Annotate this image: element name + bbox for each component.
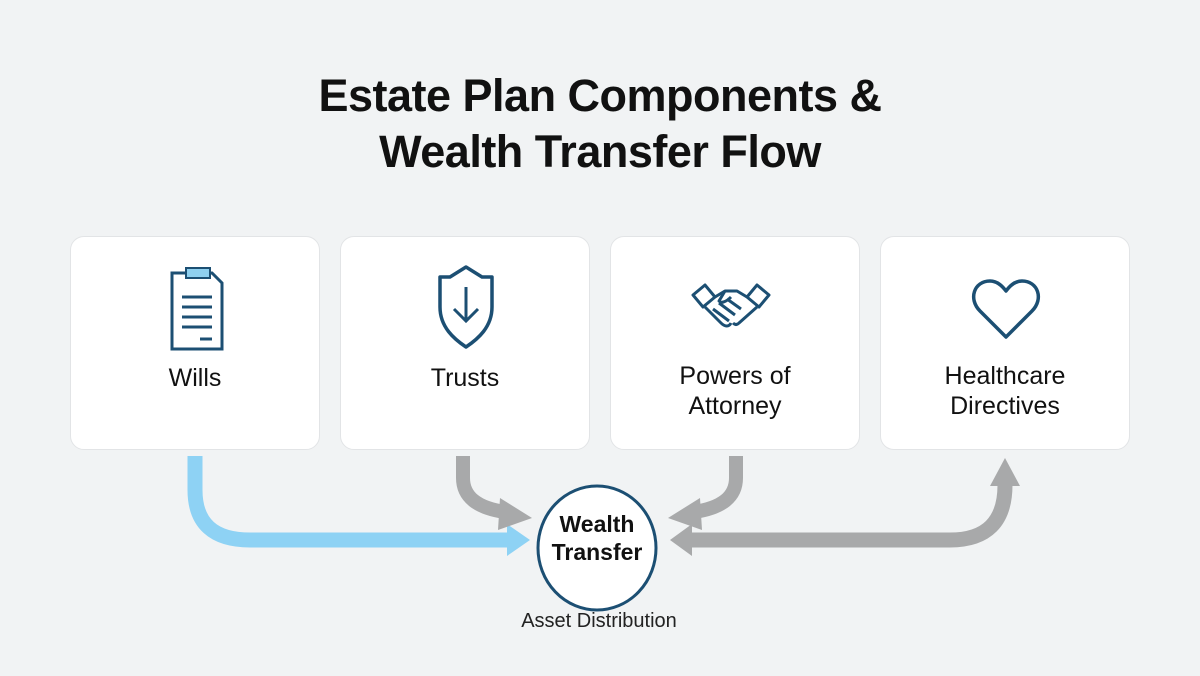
node: wealth transfer: Transfer [552, 539, 642, 565]
icon: shield [438, 265, 494, 349]
label: healthcare directives [945, 362, 1065, 420]
title [318, 70, 882, 177]
arrow: powers of attorney to wealth transfer [668, 456, 736, 530]
label: healthcare directives: Healthcare [945, 362, 1065, 390]
node: wealth transfer: Wealth [560, 511, 634, 537]
label: powers of attorney [679, 362, 791, 420]
arrow: wealth transfer to healthcare [670, 458, 1020, 556]
arrow: wills to wealth transfer [195, 456, 530, 556]
card: trusts [340, 236, 590, 450]
icon: document [170, 267, 224, 350]
label: wills: Wills [169, 364, 221, 392]
label: healthcare directives: Directives [950, 392, 1060, 420]
node: wealth transfer [538, 486, 656, 610]
title: Estate Plan Components & [318, 70, 882, 121]
card: wills [70, 236, 320, 450]
icon: heart [972, 279, 1040, 339]
title: Wealth Transfer Flow [379, 126, 821, 177]
card: powers of attorney [610, 236, 860, 450]
label: trusts: Trusts [431, 364, 499, 392]
arrow: trusts to wealth transfer [463, 456, 532, 530]
label: powers of attorney: Attorney [688, 392, 782, 420]
icon: handshake [691, 283, 771, 328]
label: powers of attorney: Powers of [679, 362, 791, 390]
card: healthcare directives [880, 236, 1130, 450]
caption: asset distribution: Asset Distribution [521, 610, 677, 632]
